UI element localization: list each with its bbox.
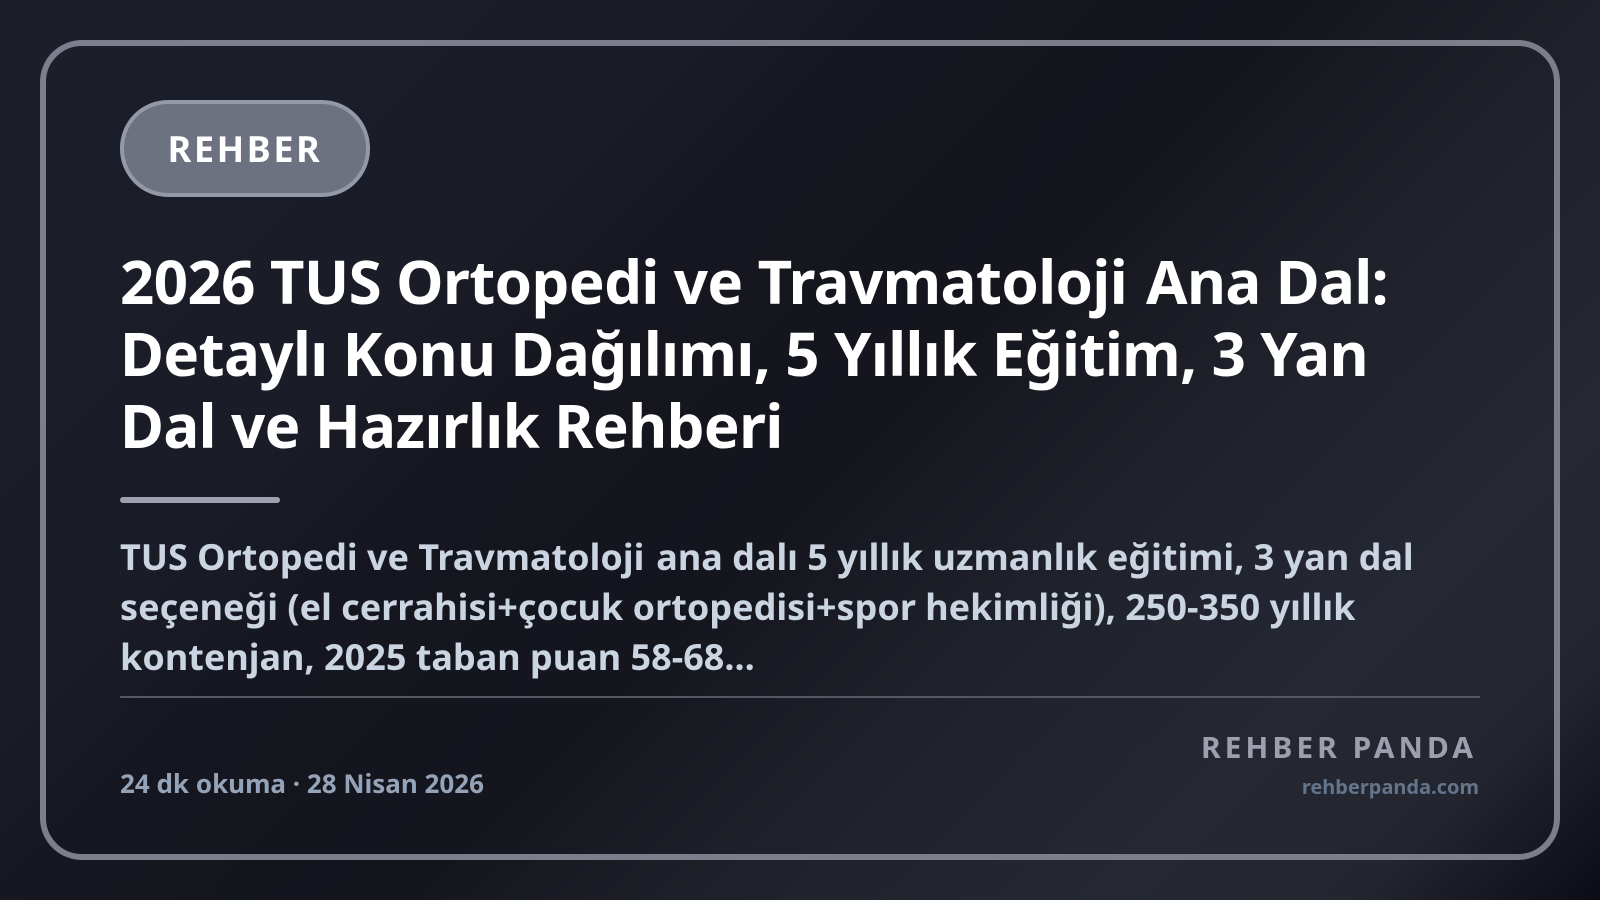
description: TUS Ortopedi ve Travmatoloji ana dalı 5 yıllık uzmanlık eğitimi, 3 yan dal: [120, 532, 1414, 581]
divider: [120, 696, 1480, 698]
badge: REHBER: REHBER: [168, 124, 322, 173]
description: seçeneği (el cerrahisi+çocuk ortopedisi+spor hekimliği), 250-350 yıllık: [120, 582, 1356, 631]
reading time and date: 24 dk okuma · 28 Nisan 2026: [120, 765, 484, 801]
title: 2026 TUS Ortopedi ve Travmatoloji Ana Dal:: [120, 240, 1388, 322]
badge: REHBER: [120, 100, 370, 197]
brand name: REHBER PANDA: [1201, 726, 1477, 767]
accent underline: [120, 497, 280, 503]
description: kontenjan, 2025 taban puan 58-68...: [120, 632, 755, 681]
description: [120, 532, 1414, 681]
title: Detaylı Konu Dağılımı, 5 Yıllık Eğitim, 3 Yan: [120, 312, 1368, 394]
title: Dal ve Hazırlık Rehberi: [120, 384, 783, 466]
title: [120, 240, 1388, 466]
website: rehberpanda.com: [1302, 773, 1479, 800]
